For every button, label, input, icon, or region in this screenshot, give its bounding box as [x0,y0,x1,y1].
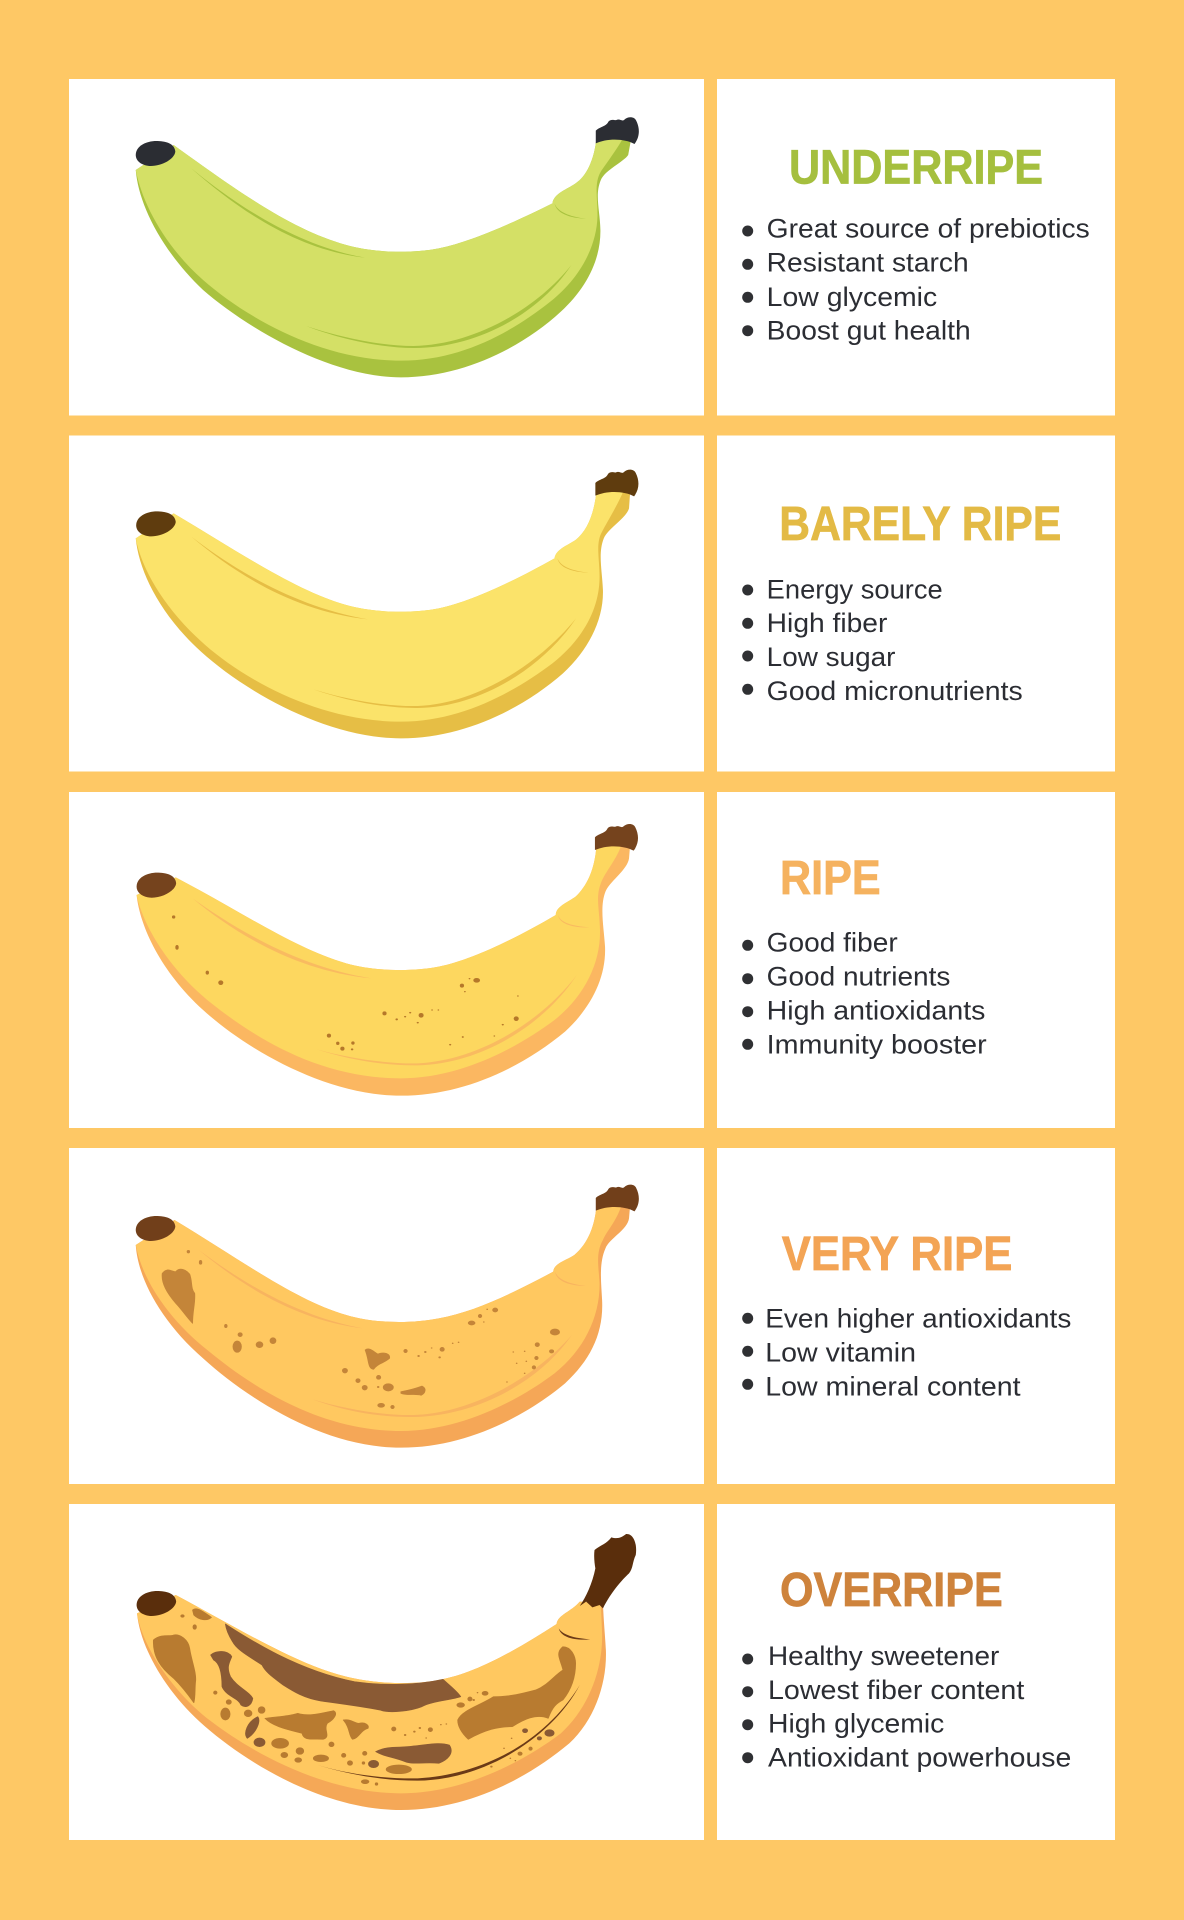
list: ripe benefits: Good nutrients [767,961,950,991]
panel: overripe facts [717,1504,1115,1840]
list: barely ripe benefits: High fiber [767,608,887,638]
list: very ripe benefits: Low vitamin [765,1337,916,1367]
list: barely ripe benefits: Energy source [767,574,943,604]
list: barely ripe benefits: Low sugar [767,642,895,672]
list: ripe benefits: Immunity booster [767,1029,987,1059]
panel: very ripe banana [69,1148,704,1484]
heading: overripe: OVERRIPE [780,1564,1003,1617]
list: overripe benefits: High glycemic [768,1709,944,1739]
illustration: green underripe banana [136,117,639,377]
list: very ripe benefits: Low mineral content [765,1372,1021,1402]
list: overripe benefits [742,1641,1071,1772]
blackened stem [580,1534,636,1608]
list: underripe benefits: Low glycemic [767,282,937,312]
illustration: ripe banana with small specks [137,824,638,1096]
heading: very ripe: VERY RIPE [782,1228,1012,1281]
panel: ripe banana [69,792,704,1128]
list: barely ripe benefits: Good micronutrients [767,676,1023,706]
list: overripe benefits: Lowest fiber content [768,1675,1025,1705]
list: very ripe benefits [742,1303,1071,1402]
illustration: yellow barely ripe banana [136,470,638,738]
panel: ripe facts [717,792,1115,1128]
list: overripe benefits: Antioxidant powerhouse [768,1742,1071,1772]
panel: barely ripe facts [717,436,1115,772]
list: ripe benefits: Good fiber [767,928,898,958]
list: underripe benefits [742,213,1090,345]
heading: barely ripe: BARELY RIPE [779,498,1061,551]
list: ripe benefits: High antioxidants [767,995,985,1025]
list: underripe benefits: Boost gut health [767,315,971,345]
list: ripe benefits [742,928,987,1059]
heading: ripe: RIPE [780,852,881,905]
dark brown patches [211,1624,554,1768]
illustration: overripe banana with dark patches [137,1534,636,1810]
panel: barely ripe banana [69,436,704,772]
illustration: very ripe banana with brown spots [136,1185,639,1448]
specks [172,915,519,1051]
panel: overripe banana [69,1504,704,1840]
list: barely ripe benefits [742,574,1023,706]
list: very ripe benefits: Even higher antioxidants [765,1303,1071,1333]
panel: underripe facts [717,79,1115,416]
list: overripe benefits: Healthy sweetener [768,1641,999,1671]
panel: underripe banana [69,79,704,416]
tan patches and spots [153,1609,576,1785]
list: underripe benefits: Great source of prebiotics [767,213,1090,243]
brown spots and stains [162,1250,560,1409]
list: underripe benefits: Resistant starch [767,248,969,278]
heading: underripe: UNDERRIPE [789,141,1043,194]
panel: very ripe facts [717,1148,1115,1484]
